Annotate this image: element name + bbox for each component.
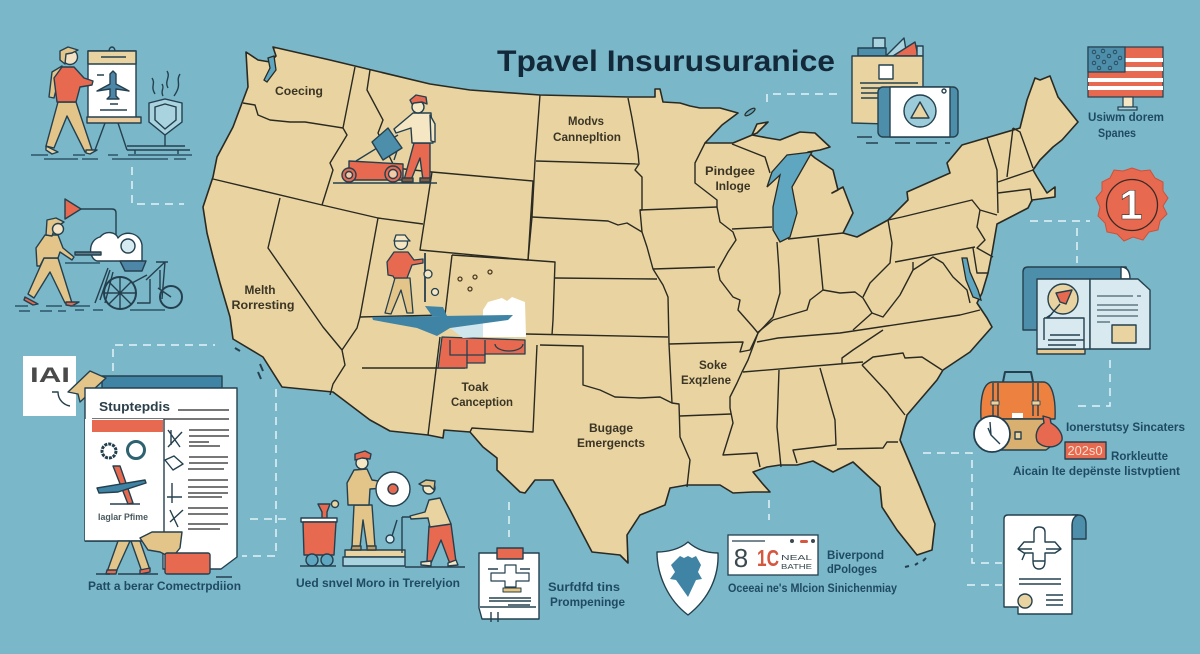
heading line [92,410,229,419]
leaf [670,556,702,597]
person torso [54,67,93,102]
stand [127,135,190,154]
tan strip [1037,349,1085,354]
label: rorresting: Rorresting [232,300,294,312]
curl [1072,515,1086,539]
sheet [479,553,539,619]
light blue panel [450,323,483,338]
folder [852,56,923,125]
ground [857,137,950,143]
coral lines [450,340,523,363]
numeral: 1 [1119,181,1143,228]
right column text lines [188,430,229,529]
label: soke: Soke [699,360,727,372]
hair [410,95,427,104]
tab square [873,38,885,48]
right column icons [165,430,183,527]
person head [62,50,78,64]
shield body [657,542,718,615]
person shoes [46,146,97,154]
line one: Biverpond [827,550,884,562]
person hair [60,47,78,64]
date tag [1065,442,1106,459]
card [728,535,818,575]
line one: Usiwm dorem [1088,112,1164,124]
head [394,236,408,250]
ground lines [15,263,165,311]
pill [800,540,808,543]
cross [1018,527,1061,569]
tan base [503,588,521,592]
inner ring [1106,180,1158,230]
mower wheels [342,166,401,182]
note [879,65,893,79]
caption: bag [1013,422,1185,478]
line two: Prompeninge [550,597,625,609]
white stripes [1088,58,1163,90]
label: pindgee: Pindgee [705,166,755,178]
text lines [1019,579,1063,605]
bulb stem [1046,304,1060,318]
line one: Surfdfd tins [548,582,620,594]
land outline [203,47,1078,563]
label: emergencts: Emergencts [577,438,645,450]
bulb figure [1056,290,1072,304]
shoes [402,178,430,182]
Isle Royale [744,107,756,117]
gear [1096,168,1168,241]
cloud window [121,239,135,253]
note text: IAI [30,364,70,387]
top dashes [488,568,530,570]
bike frame [95,262,171,303]
icon: person with mower [333,95,437,183]
buckle right [1032,401,1040,405]
blue box [372,128,402,160]
ground [96,574,232,577]
small text two: BATHE [781,562,812,571]
label: modvs: Modvs [568,116,604,128]
label: cannepltion: Cannepltion [553,132,621,144]
ground [333,182,437,184]
text lines [480,598,536,622]
cloud [91,233,142,261]
coral block [438,337,525,368]
hand [140,532,182,558]
pole and ball [392,517,410,553]
platform top [345,550,405,557]
woman hair [46,218,64,236]
Puget Sound and Chesapeake [264,56,981,300]
small text one: NEAL [781,553,812,562]
board lines [97,57,127,110]
mower cart [349,161,403,180]
man shoes [351,546,376,550]
left page [1037,279,1090,349]
line two: dPologes [827,564,877,576]
back cover [102,376,222,390]
teal tab [858,48,886,56]
wire [80,209,116,235]
state borders [213,67,1033,487]
tape [68,371,106,402]
buckles [991,401,999,405]
column rule [85,419,164,541]
caption: flag [1088,112,1164,140]
seal [1018,594,1032,608]
line two: Spanes [1098,128,1136,140]
top rule [732,540,765,542]
boy hair [419,480,435,490]
caption: brochure: Patt a berar Comectrpdiion [88,581,241,593]
small ball [386,535,394,543]
icon: stat card [728,535,818,575]
bulb [1048,284,1078,314]
caption: Iaglar Pfime [98,512,148,522]
man head [356,457,368,469]
triangle [911,102,929,118]
icon: folder and tablet [852,38,958,143]
anvil [372,315,513,336]
canton [1088,47,1125,72]
plane illustration [97,466,146,504]
legs [107,541,150,572]
coral cone [65,199,81,219]
man torso [347,469,385,505]
cap [394,235,410,241]
note card [23,356,76,416]
folder lines [860,83,918,98]
tan square [1112,325,1136,343]
label: canception: Canception [451,397,513,409]
cart wheels [306,554,333,566]
woman shoes [24,297,79,306]
label: inloge: Inloge [716,181,750,193]
caption: clipboard [548,582,625,609]
legs [385,278,413,314]
arm [430,115,435,142]
panel: brochure document [23,356,237,577]
boy shoes [421,560,458,566]
back cover [1023,267,1130,330]
title: Tpavel Insurusuranice [497,45,835,78]
easel tray [87,117,141,123]
pole [424,253,426,302]
right sheet [917,46,923,56]
person backpack [49,66,62,98]
line one: Ionerstutsy Sincaters [1066,422,1185,434]
icon: woman with cloud and wheelchair [15,199,182,311]
Lake Michigan [767,152,812,242]
cross [491,565,529,587]
disc center [388,484,398,494]
scale pans [1018,549,1061,561]
cart ball [332,500,338,508]
tablet [878,87,958,137]
icon: shield [657,542,718,615]
latch [1012,413,1023,418]
flag [1088,47,1163,97]
disc [376,472,410,506]
right text [1097,296,1141,322]
bag lower [1000,419,1050,450]
right page [1090,279,1150,349]
big eight: 8 [734,543,748,573]
platform base [343,557,405,566]
basket [120,261,146,271]
boy torso [410,498,451,527]
boy head [423,482,435,494]
icon: man with pole and anvil overlay [372,235,526,368]
bike wheel [160,286,182,308]
icon: number one badge [1096,168,1168,241]
note curve [52,392,70,406]
icon: person presenting plane on easel [46,47,141,154]
heading: Stuptepdis [99,399,170,414]
cart ground [300,565,336,567]
label: meith rorresting: Melth [244,285,276,297]
torso [394,113,433,143]
clip [497,548,523,559]
gear icon [102,444,116,458]
man legs [352,505,375,547]
woman torso [36,235,74,266]
easel hook [109,47,115,51]
coral sheet [893,42,918,56]
person legs [46,102,92,152]
legs [404,143,430,180]
mower handle [356,135,398,161]
line three: Oceeai ne's Mlcion Sinichenmiay [728,583,898,595]
wheel spokes [104,277,136,309]
bag body [981,382,1055,419]
dots [790,539,815,543]
USA map [203,47,1078,567]
woman head [52,224,64,234]
boy legs [427,524,456,564]
coral bar [92,420,163,432]
smoke [152,71,180,96]
label: coecing: Coecing [275,86,323,98]
caption: card side text [728,550,898,595]
white corner [1121,267,1130,279]
date text: 202s0 [1068,443,1102,458]
icon: cart and workers [300,451,465,567]
inner shield [155,104,176,129]
clock [974,416,1010,452]
cloud bar [75,252,101,255]
pouch [1036,416,1062,447]
cart rim [301,518,337,522]
map dots [458,270,492,291]
icon: bag, clock and pouch [974,372,1106,459]
white panel [483,297,526,337]
coral code: 1C [757,545,779,571]
label: toak: Toak [462,382,489,394]
tablet screen [890,87,950,137]
easel board [88,51,136,118]
map labels [232,86,755,450]
cart body [303,522,336,555]
shield [149,99,182,135]
small plane [425,306,447,316]
balls [424,270,438,296]
man hair [355,451,371,460]
coral box [165,553,210,574]
plane [97,71,129,99]
icon: medical scroll [1004,515,1086,614]
base [1118,107,1137,110]
sheet [1004,515,1078,614]
caption: cart: Ued snvel Moro in Trerelyion [296,578,460,590]
line two: Rorkleutte [1111,451,1168,463]
label: bugage: Bugage [589,423,633,435]
left column [85,419,164,541]
dashed connectors [113,94,1110,585]
woman legs [28,258,72,303]
straps [993,383,1038,416]
lock [1015,432,1021,439]
ring icon [128,442,144,458]
right page [85,388,237,569]
label: exqzlene: Exqzlene [681,375,731,387]
stand [1123,97,1133,107]
head [412,101,424,113]
icon: shield with smoke [31,71,192,159]
line three: Aicain lte depënste listvptient [1013,466,1180,478]
ground lines [31,155,192,159]
shoes [106,568,150,574]
wheelchair wheel [104,277,136,309]
icon: medical clipboard [479,548,539,622]
ground [405,566,465,568]
dot [942,89,946,93]
icon: open book [1023,267,1150,354]
circle [904,95,936,127]
clock hands [988,422,1000,444]
left text [1044,318,1084,349]
icon: flag monitor [1088,47,1163,110]
teal sheet [886,38,907,56]
easel legs [95,123,127,150]
handle [1003,372,1033,382]
cart top [318,504,330,519]
torso [387,252,423,278]
easel header [88,51,136,64]
Channel Islands and Florida keys [235,348,926,567]
stars [1092,49,1122,70]
